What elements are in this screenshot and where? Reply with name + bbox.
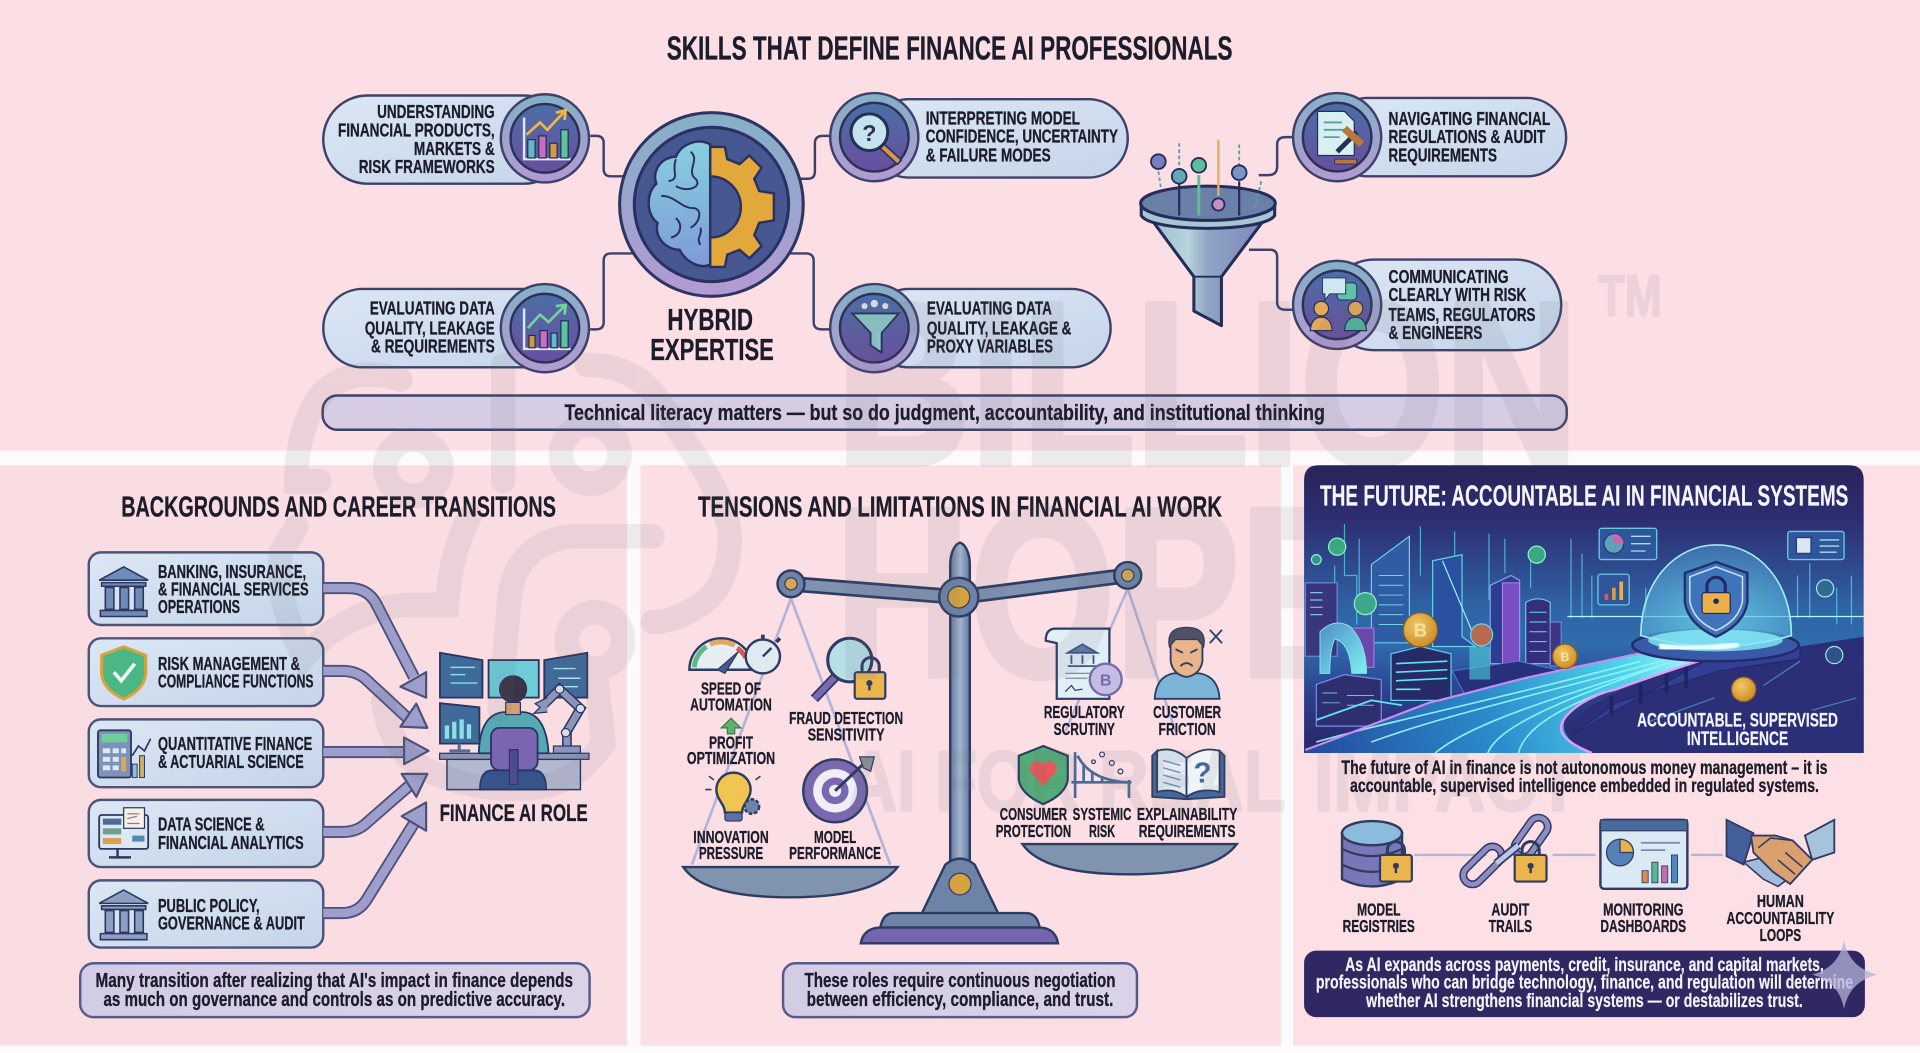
background box: risk management: RISK MANAGEMENT & (158, 653, 300, 674)
arrows converging on finance AI role (323, 588, 429, 913)
futuristic city scene with shield dome (1304, 465, 1864, 753)
item: fraud detection sensitivity: SENSITIVITY (808, 725, 885, 745)
item: consumer protection (996, 746, 1071, 841)
watermark: logo and wordmark: HOPE (835, 459, 1364, 728)
item: innovation pressure: INNOVATION (693, 827, 769, 847)
lower right ground and bridge (1561, 637, 1864, 753)
item: innovation pressure (693, 773, 769, 863)
icon: sparkle (1812, 940, 1877, 1009)
background box: quantitative finance: & ACTUARIAL SCIENCE (158, 751, 304, 772)
brain folds (661, 152, 701, 245)
heading: backgrounds: BACKGROUNDS AND CAREER TRANSITIONS (121, 492, 556, 524)
background box: banking (89, 552, 323, 625)
item: innovation pressure: PRESSURE (699, 843, 763, 863)
item: regulatory scrutiny: SCRUTINY (1054, 719, 1115, 739)
callout: career transition note: as much on governance and controls as on predictive accuracy. (103, 988, 565, 1011)
background box: data science: DATA SCIENCE & (158, 814, 264, 835)
watermark: logo and wordmark (280, 254, 1662, 830)
skill pill: interpreting model confidence: CONFIDENCE, UNCERTAINTY (926, 126, 1118, 147)
background box: data science: FINANCIAL ANALYTICS (158, 832, 304, 853)
item: profit optimization: PROFIT (709, 733, 753, 752)
skill pill: evaluating data quality, leakage and proxy variables (830, 284, 1111, 372)
icon: large funnel with data points (1141, 140, 1275, 326)
background box: public policy (89, 880, 323, 948)
item: speed of automation: SPEED OF (701, 679, 761, 699)
skill pill: navigating financial regulations: NAVIGATING FINANCIAL (1389, 108, 1550, 129)
callout: continuous negotiation: These roles require continuous negotiation (804, 969, 1116, 992)
background box: banking: OPERATIONS (158, 596, 240, 617)
skill pill: communicating clearly: COMMUNICATING (1389, 266, 1509, 287)
background box: quantitative finance: QUANTITATIVE FINANCE (158, 733, 312, 754)
item: model registries: MODEL (1357, 900, 1401, 919)
icon: rising chart (501, 94, 589, 182)
item: monitoring dashboards (1600, 820, 1687, 936)
background box: quantitative finance (89, 719, 323, 787)
item: regulatory scrutiny: REGULATORY (1044, 702, 1125, 722)
heading: hybrid expertise (650, 303, 774, 367)
background box: banking: BANKING, INSURANCE, (158, 561, 306, 582)
skill pill: communicating clearly: CLEARLY WITH RISK (1389, 284, 1527, 305)
skill pill: understanding financial products (323, 94, 589, 184)
item: customer friction: CUSTOMER (1153, 702, 1221, 722)
icon: finance AI workstation (440, 653, 589, 790)
skill pill: evaluating data quality, leakage and requirements: & REQUIREMENTS (371, 336, 495, 357)
background box: public policy: PUBLIC POLICY, (158, 895, 260, 916)
coins and badges: B (1560, 650, 1569, 664)
lower right content (1304, 757, 1865, 1017)
info panels (1598, 528, 1844, 605)
skill pill: evaluating data quality, leakage and proxy variables: QUALITY, LEAKAGE & (927, 317, 1071, 338)
item: monitoring dashboards: DASHBOARDS (1600, 916, 1686, 936)
item: fraud detection sensitivity: FRAUD DETECTION (789, 708, 903, 728)
item: explainability requirements (1137, 749, 1238, 841)
item: profit optimization: OPTIMIZATION (687, 748, 775, 768)
scene caption (1637, 710, 1838, 750)
skill pill: understanding financial products: FINANCIAL PRODUCTS, (338, 120, 495, 141)
item: regulatory scrutiny: B (1100, 673, 1111, 689)
icon: growth chart (501, 284, 589, 372)
road of light (1305, 646, 1718, 753)
item: explainability requirements: EXPLAINABILITY (1137, 804, 1238, 824)
heading: hybrid expertise: HYBRID (667, 303, 753, 337)
skill pill: evaluating data quality, leakage and requirements: QUALITY, LEAKAGE (365, 317, 495, 338)
label: finance AI role: FINANCE AI ROLE (440, 800, 588, 827)
item: model registries (1342, 821, 1415, 936)
scene caption: INTELLIGENCE (1687, 728, 1788, 750)
item: model performance (789, 757, 881, 863)
skill pill: communicating clearly: TEAMS, REGULATORS (1389, 304, 1536, 325)
icon: small filter funnel (830, 284, 918, 372)
callout: continuous negotiation (783, 963, 1137, 1017)
circuit lines (1322, 524, 1851, 624)
item: systemic risk (1071, 752, 1132, 841)
item: human accountability loops: HUMAN (1757, 891, 1804, 911)
banner: technical literacy: Technical literacy matters — but so do judgment, accountability, and institutional thinking (564, 400, 1325, 425)
skill pill: navigating financial regulations: REGULATIONS & AUDIT (1389, 126, 1546, 147)
text block: future statement (1341, 757, 1828, 797)
scale strings (692, 589, 1176, 865)
callout: career transition note: Many transition after realizing that AI's impact in finance depends (96, 969, 573, 992)
item: speed of automation (689, 635, 780, 714)
watermark: logo and wordmark: BILLION (836, 254, 1578, 514)
item: fraud detection sensitivity (789, 638, 903, 745)
connector lines (590, 136, 1294, 329)
panel: tensions and limitations (683, 492, 1238, 1017)
item: systemic risk: RISK (1089, 821, 1115, 841)
skill pill: interpreting model confidence: & FAILURE MODES (926, 145, 1051, 166)
item: model performance: PERFORMANCE (789, 843, 881, 863)
icon: document and gavel (1293, 93, 1381, 181)
background box: banking: & FINANCIAL SERVICES (158, 578, 309, 599)
title: SKILLS THAT DEFINE FINANCE AI PROFESSIONALS (667, 30, 1232, 67)
callout: closing statement (1304, 951, 1865, 1017)
scene caption: ACCOUNTABLE, SUPERVISED (1637, 710, 1838, 732)
shield dome (1632, 545, 1799, 661)
item: systemic risk: SYSTEMIC (1073, 804, 1132, 824)
horizon glow (1518, 614, 1864, 618)
item: human accountability loops (1727, 820, 1834, 945)
item: speed of automation: AUTOMATION (690, 695, 772, 714)
skill pill: understanding financial products: MARKETS & (414, 138, 495, 159)
skill pill: interpreting model confidence (830, 93, 1128, 181)
background box: public policy: GOVERNANCE & AUDIT (158, 912, 305, 933)
item: profit optimization (687, 718, 775, 768)
background box: risk management: COMPLIANCE FUNCTIONS (158, 670, 313, 691)
skill pill: communicating clearly (1293, 260, 1561, 350)
icon: two people talking (1293, 261, 1381, 349)
skill pill: evaluating data quality, leakage and requirements: EVALUATING DATA (370, 298, 495, 319)
heading: tensions: TENSIONS AND LIMITATIONS IN FINANCIAL AI WORK (698, 492, 1222, 524)
skill pill: understanding financial products: UNDERSTANDING (377, 101, 495, 122)
panels: left and middle lower sections (80, 492, 1238, 1017)
watermark: logo and wordmark: IMPACT (1314, 734, 1580, 830)
skill pill: navigating financial regulations: REQUIREMENTS (1389, 145, 1497, 166)
panel: backgrounds and career transitions (80, 492, 590, 1017)
item: explainability requirements: ? (1193, 757, 1211, 789)
item: model registries: REGISTRIES (1343, 916, 1415, 936)
callout: career transition note (80, 963, 590, 1017)
panel: the future of accountable AI (1304, 465, 1865, 1017)
skill pill: evaluating data quality, leakage and proxy variables: PROXY VARIABLES (927, 336, 1053, 357)
item: audit trails: AUDIT (1491, 900, 1530, 919)
item: regulatory scrutiny (1044, 629, 1125, 739)
item: consumer protection: CONSUMER (1000, 804, 1067, 824)
icon: magnifier with question mark (830, 93, 918, 181)
item: customer friction: FRICTION (1159, 719, 1216, 739)
heading: hybrid expertise: EXPERTISE (650, 333, 774, 367)
central hybrid expertise medallion (620, 113, 803, 296)
item: audit trails (1459, 814, 1551, 936)
watermark: logo and wordmark: AI FOR REAL (847, 734, 1286, 830)
skill pill: interpreting model confidence: INTERPRETING MODEL (926, 107, 1080, 128)
skill pill: evaluating data quality, leakage and proxy variables: EVALUATING DATA (927, 298, 1052, 319)
city buildings (1305, 536, 1856, 726)
item: explainability requirements: REQUIREMENTS (1139, 821, 1236, 841)
item: consumer protection: PROTECTION (996, 821, 1071, 841)
item: human accountability loops: LOOPS (1760, 925, 1801, 945)
background box: risk management (89, 638, 323, 706)
skill pill: evaluating data quality, leakage and requirements (323, 284, 589, 372)
watermark: logo and wordmark: TM (1598, 264, 1662, 329)
icon: magnifier with question mark: ? (862, 120, 876, 146)
item: monitoring dashboards: MONITORING (1603, 900, 1683, 919)
icon: gear half (710, 147, 774, 267)
coins and badges (1311, 538, 1843, 702)
item: customer friction (1153, 627, 1222, 739)
balance scale (683, 543, 1237, 943)
banner: technical literacy (323, 395, 1567, 430)
linking lines (1414, 854, 1723, 856)
skill pill: navigating financial regulations (1293, 93, 1566, 181)
skill pill: communicating clearly: & ENGINEERS (1389, 322, 1482, 343)
callout: continuous negotiation: between efficiency, compliance, and trust. (807, 988, 1113, 1011)
coins and badges: B (1414, 620, 1427, 641)
item: audit trails: TRAILS (1489, 916, 1532, 936)
item: human accountability loops: ACCOUNTABILITY (1727, 908, 1834, 928)
background box: data science (89, 800, 323, 867)
icon: brain half (649, 142, 710, 266)
skill pill: understanding financial products: RISK FRAMEWORKS (359, 156, 495, 177)
item: model performance: MODEL (814, 827, 856, 847)
